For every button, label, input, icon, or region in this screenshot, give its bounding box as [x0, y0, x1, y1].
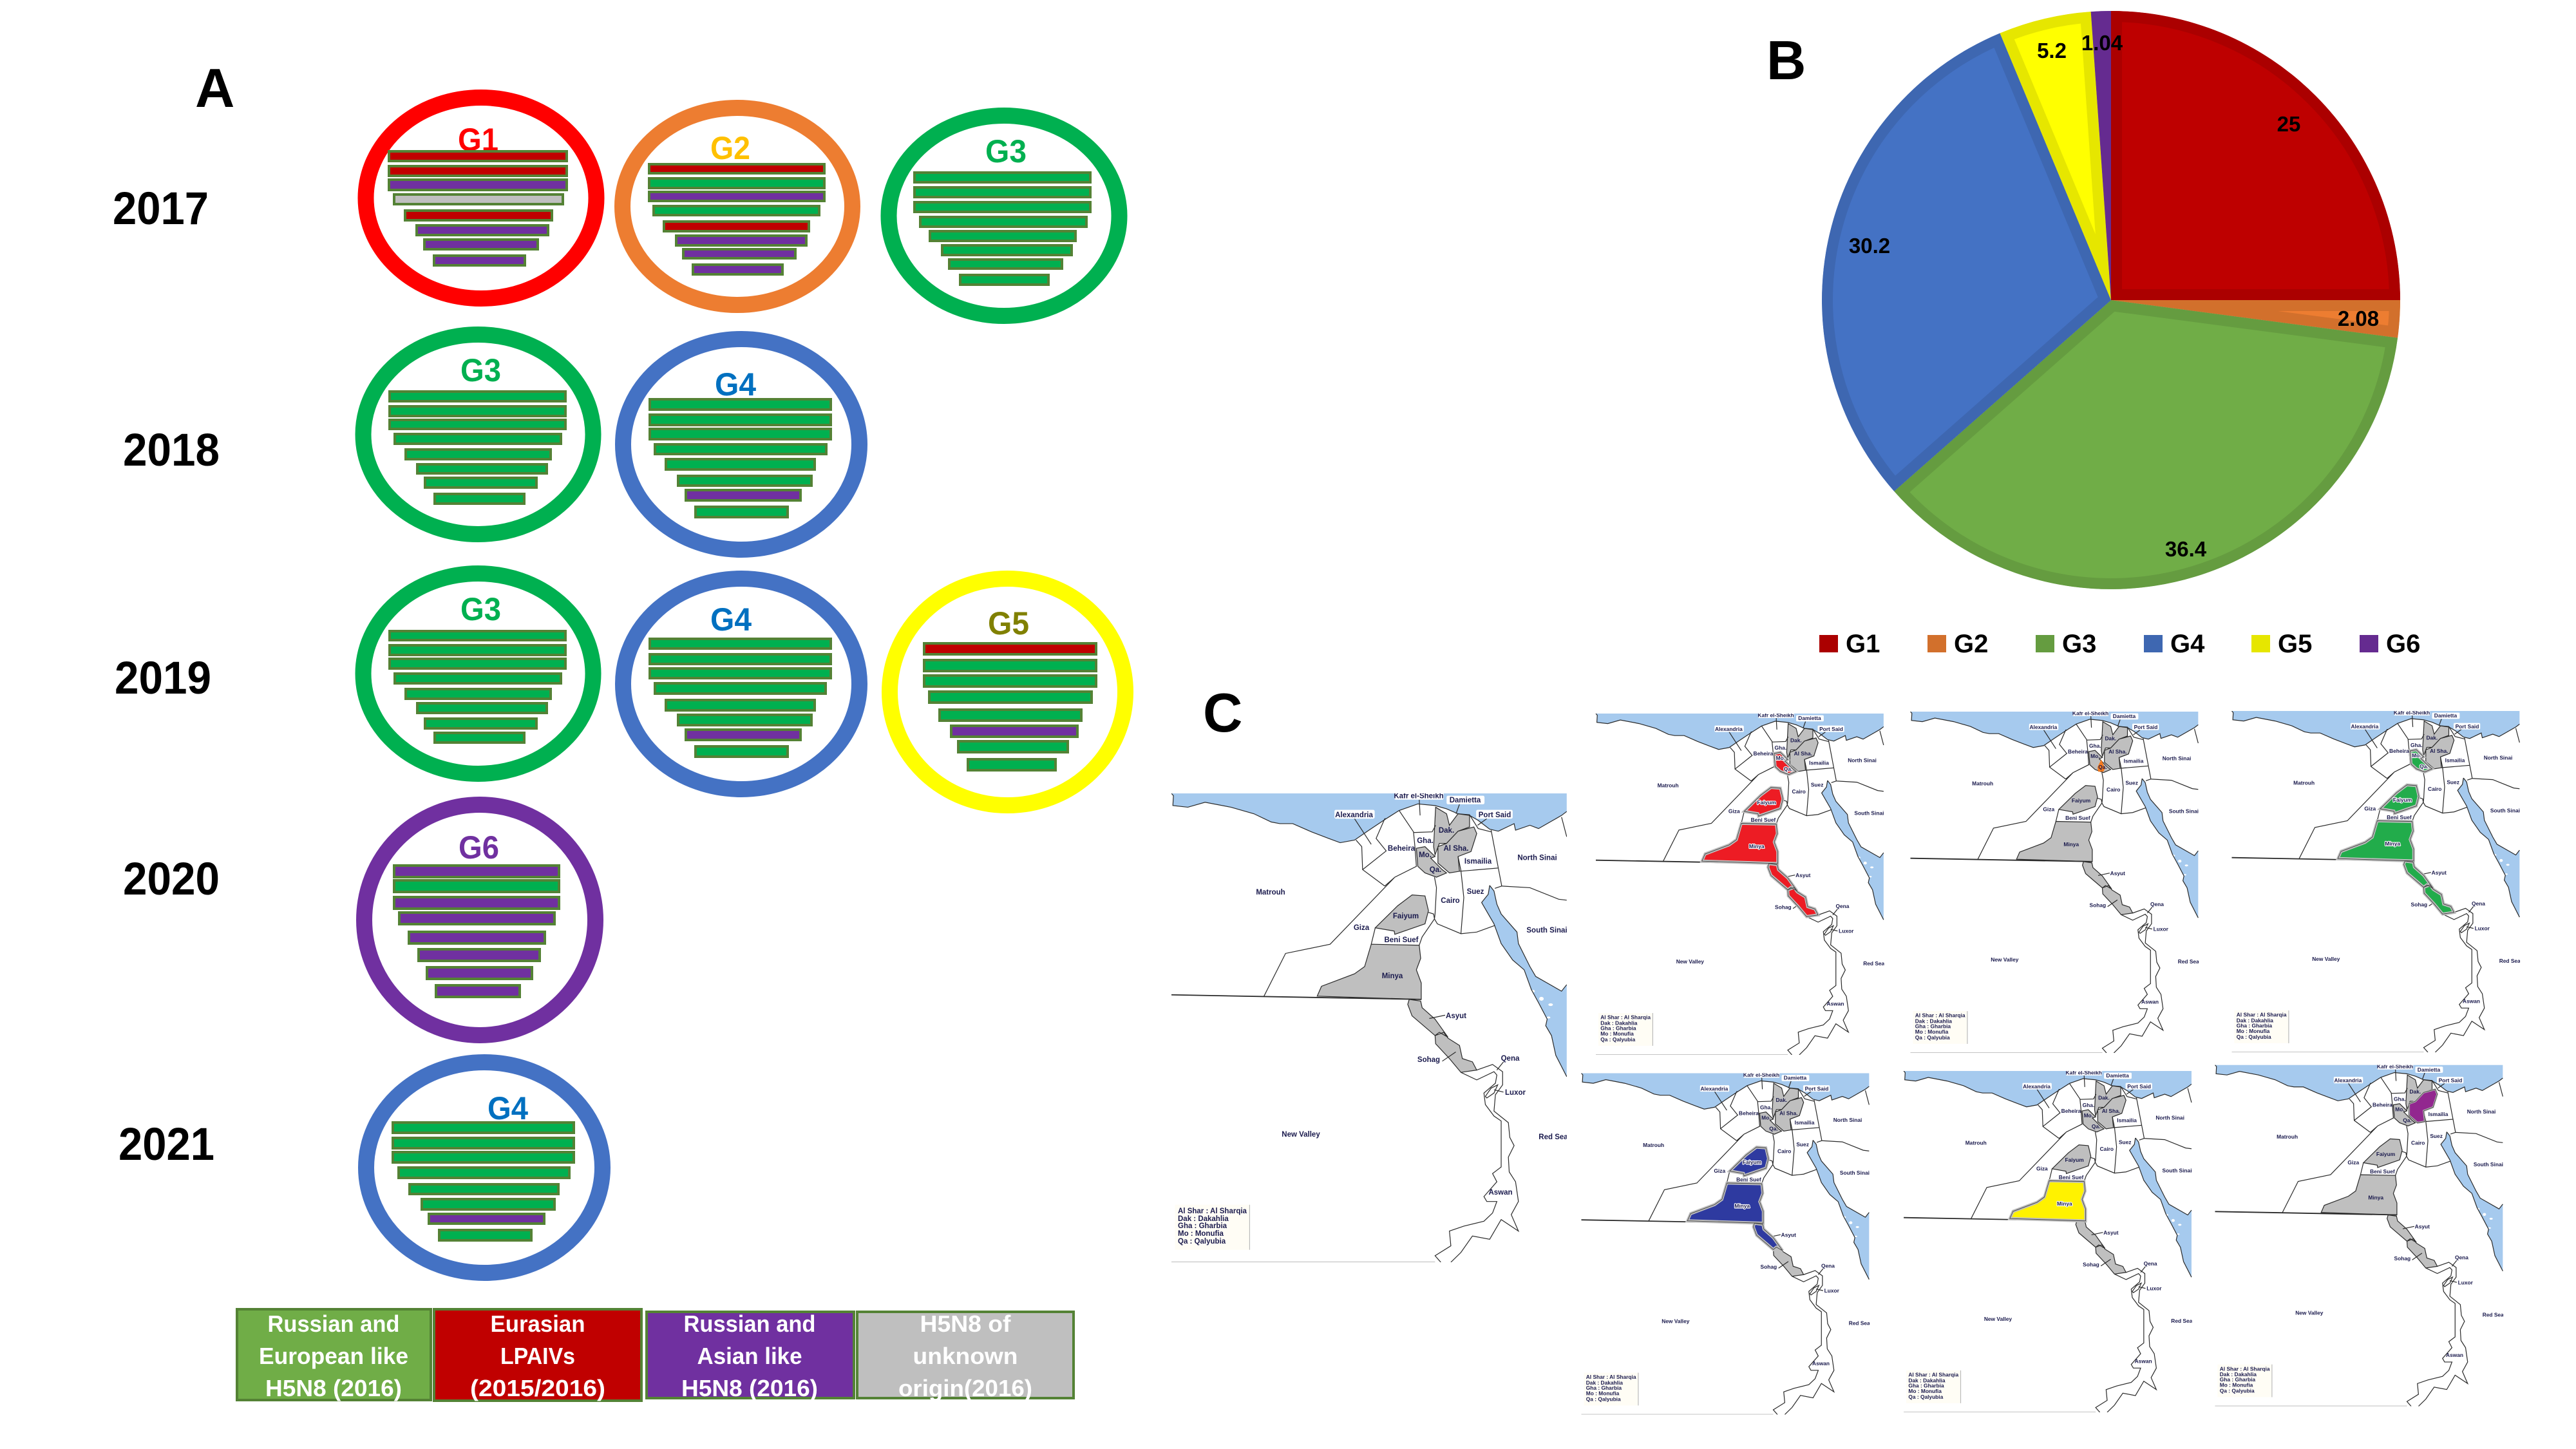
map: G3 distribution (green): Cairo	[2428, 786, 2441, 792]
map: G4 distribution (blue): Matrouh	[1643, 1142, 1664, 1148]
genotype G3 2017	[889, 116, 1119, 316]
map: G1 distribution (red): Sohag	[1775, 904, 1792, 911]
map: Egypt governorates overview: Suez	[1467, 888, 1484, 896]
legend box: H5N8 of unknown origin: H5N8 of	[920, 1311, 1012, 1337]
map: G5 distribution (yellow): Ismailia	[2117, 1117, 2137, 1123]
map: G4 distribution (blue): Alexandria	[1701, 1085, 1728, 1092]
map: G5 distribution (yellow): Suez	[2119, 1139, 2131, 1146]
map: G6 distribution (purple): Faiyum	[2376, 1151, 2395, 1157]
map: G4 distribution (blue): Beni Suef	[1736, 1177, 1761, 1183]
map: G5 distribution (yellow): Al Shar : Al Sharqia	[1908, 1372, 1958, 1378]
pie legend: G3	[2062, 630, 2096, 658]
legend: lineage origin boxes	[237, 1309, 1074, 1401]
map: G5 distribution (yellow): Kafr el-Sheikh	[2066, 1069, 2102, 1075]
map: G2 distribution (orange): Alexandria	[2030, 724, 2058, 730]
genotype G3 2017: G3	[985, 133, 1027, 169]
map: G4 distribution (blue): Al Sha.	[1779, 1110, 1797, 1116]
map: G6 distribution (purple): Al Shar : Al Sharqia	[2220, 1365, 2270, 1372]
map: G1 distribution (red): Giza	[1728, 808, 1740, 814]
map: G4 distribution (blue): Faiyum	[1743, 1159, 1761, 1166]
pie legend: G4	[2170, 630, 2205, 658]
pie legend	[1819, 630, 2420, 658]
pie chart: 30.2	[1849, 234, 1890, 258]
map: Egypt governorates overview: Gha.	[1417, 837, 1434, 845]
genotype G5 2019	[890, 578, 1126, 805]
map: G4 distribution (blue): Qa : Qalyubia	[1586, 1396, 1621, 1402]
pie chart: 2.08	[2338, 307, 2379, 330]
pie legend: G6	[2386, 630, 2420, 658]
map: G1 distribution (red): Qa.	[1784, 766, 1792, 772]
legend box: Russian and European like	[237, 1309, 431, 1401]
map: G6 distribution (purple): Matrouh	[2277, 1133, 2298, 1140]
map: G6 distribution (purple): Luxor	[2458, 1279, 2474, 1285]
map: G2 distribution (orange): Kafr el-Sheikh	[2072, 710, 2108, 716]
map: G3 distribution (green): Beni Suef	[2387, 814, 2412, 820]
map: G6 distribution (purple)	[2215, 1063, 2504, 1406]
map: G2 distribution (orange): South Sinai	[2169, 808, 2199, 814]
map: G2 distribution (orange): Qa.	[2098, 764, 2107, 770]
map: G4 distribution (blue): Giza	[1714, 1168, 1725, 1174]
map: G2 distribution (orange): Qa : Qalyubia	[1915, 1034, 1950, 1041]
map: G5 distribution (yellow): Matrouh	[1965, 1139, 1987, 1146]
legend box: H5N8 of unknown origin: origin(2016)	[898, 1375, 1032, 1401]
map: G2 distribution (orange): Luxor	[2154, 926, 2169, 933]
map: G6 distribution (purple): Gha.	[2394, 1096, 2406, 1103]
map: G2 distribution (orange): Asyut	[2110, 870, 2125, 876]
map: G3 distribution (green): Alexandria	[2351, 723, 2379, 730]
map: Egypt governorates overview: Dak.	[1439, 827, 1454, 835]
map: G4 distribution (blue): Gha : Gharbia	[1586, 1385, 1622, 1391]
map: G4 distribution (blue): Suez	[1796, 1141, 1809, 1148]
map: G6 distribution (purple): Mo.	[2395, 1106, 2405, 1113]
map: Egypt governorates overview: Ismailia	[1464, 858, 1492, 866]
map: G3 distribution (green): Ismailia	[2445, 757, 2465, 763]
map: G1 distribution (red): Damietta	[1798, 715, 1821, 721]
map: G4 distribution (blue): Cairo	[1777, 1148, 1791, 1154]
map: G1 distribution (red): Minya	[1749, 843, 1765, 849]
map: G6 distribution (purple): South Sinai	[2474, 1161, 2503, 1168]
map: Egypt governorates overview: Dak : Dakahlia	[1178, 1215, 1229, 1223]
map: G5 distribution (yellow): Damietta	[2106, 1072, 2129, 1079]
map: G3 distribution (green): Matrouh	[2293, 779, 2315, 786]
map: G3 distribution (green): Red Sea	[2499, 958, 2521, 964]
map: Egypt governorates overview: Red Sea	[1539, 1133, 1568, 1141]
map: Egypt governorates overview: Qa.	[1430, 866, 1441, 874]
map: Egypt governorates overview: Qa : Qalyubia	[1178, 1238, 1226, 1245]
legend box: Russian and European like: H5N8 (2016)	[265, 1375, 402, 1401]
map: G3 distribution (green): Qena	[2472, 900, 2485, 907]
year label 2018: 2018	[123, 425, 220, 476]
map: G6 distribution (purple): Red Sea	[2483, 1312, 2504, 1318]
map: G3 distribution (green): North Sinai	[2484, 754, 2512, 761]
map: G4 distribution (blue): Ismailia	[1795, 1119, 1815, 1126]
legend box: Eurasian LPAIVs	[434, 1309, 641, 1401]
map: G2 distribution (orange): Dak : Dakahlia	[1915, 1018, 1952, 1024]
map: G3 distribution (green): Qa.	[2420, 763, 2429, 770]
map: G2 distribution (orange): New Valley	[1991, 956, 2019, 963]
genotype G6 2020	[365, 805, 595, 1036]
map: G1 distribution (red): Mo : Monufia	[1600, 1030, 1634, 1037]
map: G6 distribution (purple): Sohag	[2394, 1255, 2410, 1262]
map: G6 distribution (purple): Aswan	[2446, 1352, 2463, 1358]
map: G4 distribution (blue): Luxor	[1824, 1287, 1840, 1294]
map: Egypt governorates overview: Faiyum	[1393, 913, 1419, 920]
pie legend: G1	[1846, 630, 1880, 658]
map: G6 distribution (purple): Asyut	[2415, 1224, 2430, 1230]
map: G5 distribution (yellow): Giza	[2036, 1165, 2048, 1171]
map: Egypt governorates overview: New Valley	[1282, 1131, 1320, 1139]
map: G6 distribution (purple): Ismailia	[2429, 1111, 2448, 1117]
map: Egypt governorates overview: North Sinai	[1517, 854, 1557, 862]
map: G1 distribution (red): Red Sea	[1863, 960, 1885, 967]
year label 2019: 2019	[115, 653, 211, 704]
map: G3 distribution (green): Aswan	[2463, 998, 2480, 1005]
map: G2 distribution (orange): Minya	[2063, 841, 2079, 848]
map: G1 distribution (red): Al Shar : Al Sharqia	[1600, 1014, 1651, 1021]
panel label B: B	[1766, 30, 1806, 91]
legend box: Russian and Asian like: Russian and	[684, 1311, 815, 1337]
map: Egypt governorates overview: Beni Suef	[1384, 936, 1419, 944]
map: G3 distribution (green): Gha : Gharbia	[2237, 1022, 2272, 1028]
map: G6 distribution (purple): Qena	[2455, 1255, 2468, 1261]
map: G4 distribution (blue)	[1581, 1072, 1870, 1414]
genotype G3 2018: G3	[460, 352, 501, 388]
map: G6 distribution (purple): Port Said	[2439, 1077, 2462, 1084]
map: G3 distribution (green): Port Said	[2456, 723, 2479, 730]
map: G3 distribution (green): South Sinai	[2490, 807, 2520, 813]
map: G1 distribution (red): Mo.	[1776, 755, 1785, 761]
map: Egypt governorates overview: Al Sha.	[1444, 845, 1468, 853]
map: Egypt governorates overview: Cairo	[1441, 897, 1460, 905]
genotype G2 2017: G2	[710, 130, 750, 166]
map: Egypt governorates overview: Beheira	[1388, 845, 1416, 853]
genotype G1 2017	[366, 98, 596, 299]
map: G6 distribution (purple): Minya	[2368, 1195, 2383, 1201]
map: G4 distribution (blue): Qena	[1821, 1263, 1835, 1269]
map: G2 distribution (orange): Beni Suef	[2065, 815, 2090, 821]
map: G5 distribution (yellow): North Sinai	[2155, 1114, 2184, 1121]
map: Egypt governorates overview: Aswan	[1488, 1189, 1513, 1197]
map: G5 distribution (yellow): Beni Suef	[2059, 1174, 2083, 1180]
map: Egypt governorates overview	[1171, 792, 1568, 1262]
map: G1 distribution (red): Asyut	[1795, 872, 1811, 878]
map: G2 distribution (orange): Mo : Monufia	[1915, 1028, 1949, 1035]
map: G1 distribution (red): Qa : Qalyubia	[1600, 1036, 1636, 1043]
map: G5 distribution (yellow): Aswan	[2135, 1358, 2152, 1365]
map: G4 distribution (blue): Kafr el-Sheikh	[1743, 1072, 1779, 1078]
genotype G4 2021	[366, 1063, 603, 1273]
map: G4 distribution (blue): Al Shar : Al Sharqia	[1586, 1374, 1636, 1380]
genotype G1 2017: G1	[458, 122, 498, 158]
map: G2 distribution (orange): Aswan	[2141, 999, 2159, 1005]
year label 2021: 2021	[118, 1119, 214, 1170]
map: G2 distribution (orange)	[1910, 710, 2199, 1053]
genotype G4 2018	[623, 339, 859, 550]
legend box: Eurasian LPAIVs: LPAIVs	[500, 1343, 575, 1369]
map: Egypt governorates overview: Al Shar : Al Sharqia	[1178, 1208, 1247, 1215]
map: G3 distribution (green): Al Sha.	[2430, 748, 2448, 754]
map: G4 distribution (blue): Beheira	[1739, 1110, 1759, 1116]
legend box: H5N8 of unknown origin: unknown	[913, 1343, 1018, 1369]
genotype G3 2019: G3	[460, 591, 501, 627]
map: G1 distribution (red): Kafr el-Sheikh	[1757, 712, 1794, 718]
map: G6 distribution (purple): Dak : Dakahlia	[2220, 1371, 2257, 1378]
map: G3 distribution (green): Kafr el-Sheikh	[2394, 709, 2430, 715]
map: G1 distribution (red): Matrouh	[1658, 782, 1679, 788]
map: G1 distribution (red): New Valley	[1676, 958, 1704, 965]
legend box: Russian and European like: Russian and	[268, 1311, 399, 1337]
map: G5 distribution (yellow): Port Said	[2127, 1083, 2151, 1090]
map: G3 distribution (green): Qa : Qalyubia	[2237, 1034, 2271, 1040]
map: G5 distribution (yellow): Mo : Monufia	[1908, 1388, 1942, 1394]
map: G1 distribution (red): South Sinai	[1854, 810, 1884, 816]
map: G6 distribution (purple): Mo : Monufia	[2220, 1382, 2253, 1388]
map: G1 distribution (red): Port Said	[1819, 726, 1843, 732]
map: Egypt governorates overview: Matrouh	[1256, 889, 1285, 896]
map: G4 distribution (blue): Dak.	[1776, 1097, 1787, 1103]
map: G2 distribution (orange): Damietta	[2113, 713, 2136, 719]
map: G6 distribution (purple): Kafr el-Sheikh	[2377, 1063, 2413, 1070]
map: G1 distribution (red): Ismailia	[1809, 759, 1829, 766]
map: G4 distribution (blue): Minya	[1734, 1202, 1750, 1209]
map: G5 distribution (yellow): Alexandria	[2023, 1083, 2050, 1090]
map: G2 distribution (orange): Giza	[2043, 806, 2054, 812]
map: G5 distribution (yellow): Gha.	[2083, 1102, 2094, 1108]
map: G4 distribution (blue): Mo : Monufia	[1586, 1390, 1620, 1397]
map: G5 distribution (yellow): Beheira	[2061, 1108, 2081, 1114]
map: G3 distribution (green): Asyut	[2432, 869, 2447, 876]
legend box: H5N8 of unknown origin	[857, 1311, 1074, 1401]
map: G4 distribution (blue): Port Said	[1805, 1085, 1828, 1092]
map: G1 distribution (red): Alexandria	[1715, 726, 1743, 732]
map: G5 distribution (yellow): Qa.	[2092, 1123, 2100, 1130]
map: G1 distribution (red): Beheira	[1754, 750, 1774, 757]
map: G1 distribution (red): Faiyum	[1757, 799, 1776, 806]
map: G3 distribution (green): Mo : Monufia	[2237, 1028, 2270, 1034]
legend box: Eurasian LPAIVs: (2015/2016)	[470, 1375, 605, 1401]
map: G2 distribution (orange): Dak.	[2105, 735, 2116, 741]
map: G5 distribution (yellow): Dak.	[2098, 1094, 2110, 1101]
map: G6 distribution (purple): Cairo	[2411, 1139, 2425, 1146]
map: G2 distribution (orange): Gha : Gharbia	[1915, 1023, 1951, 1029]
map: G5 distribution (yellow): Qa : Qalyubia	[1908, 1394, 1944, 1400]
map: G1 distribution (red): Beni Suef	[1751, 817, 1776, 823]
map: G2 distribution (orange): Gha.	[2089, 743, 2101, 749]
map: Egypt governorates overview: Mo : Monufia	[1178, 1230, 1224, 1238]
map: G3 distribution (green): Gha.	[2410, 742, 2423, 748]
genotype G6 2020: G6	[459, 829, 499, 866]
map: G2 distribution (orange): Sohag	[2090, 902, 2106, 909]
map: G4 distribution (blue): Damietta	[1784, 1075, 1806, 1081]
map: G4 distribution (blue): Sohag	[1761, 1264, 1777, 1270]
map: G1 distribution (red): Dak.	[1790, 737, 1802, 743]
map: G1 distribution (red): Qena	[1835, 903, 1850, 909]
map: G6 distribution (purple): Giza	[2347, 1159, 2359, 1166]
panel label C: C	[1203, 683, 1242, 744]
map: G3 distribution (green): Luxor	[2475, 925, 2490, 932]
map: G6 distribution (purple): North Sinai	[2467, 1108, 2496, 1115]
map: G3 distribution (green)	[2231, 709, 2521, 1052]
map: G3 distribution (green): Minya	[2385, 840, 2400, 847]
map: G1 distribution (red): Gha : Gharbia	[1600, 1025, 1636, 1031]
genotype G2 2017	[622, 108, 853, 305]
map: G6 distribution (purple): Dak.	[2410, 1088, 2421, 1095]
map: G5 distribution (yellow): Asyut	[2103, 1229, 2119, 1236]
map: G5 distribution (yellow): Dak : Dakahlia	[1908, 1377, 1946, 1383]
map: G2 distribution (orange): Al Sha.	[2108, 748, 2126, 755]
genotype G4 2021: G4	[488, 1090, 528, 1126]
genotype G3 2018	[363, 335, 593, 535]
map: G3 distribution (green): Damietta	[2434, 712, 2457, 719]
panel label A: A	[195, 58, 234, 119]
map: G4 distribution (blue): Qa.	[1769, 1125, 1778, 1132]
map: G1 distribution (red): Luxor	[1839, 928, 1854, 934]
map: G3 distribution (green): Faiyum	[2393, 797, 2412, 803]
map: G1 distribution (red): Aswan	[1827, 1001, 1844, 1007]
map: G1 distribution (red): Cairo	[1792, 788, 1806, 795]
map: G5 distribution (yellow): Red Sea	[2171, 1318, 2193, 1324]
genotype G4 2019: G4	[710, 601, 752, 638]
map: Egypt governorates overview: Port Said	[1479, 811, 1511, 819]
map: G3 distribution (green): Beheira	[2389, 748, 2409, 754]
map: G3 distribution (green): Giza	[2364, 805, 2376, 811]
map: G4 distribution (blue): Red Sea	[1849, 1320, 1870, 1326]
legend box: Russian and Asian like	[647, 1311, 854, 1401]
pie chart	[1822, 11, 2400, 589]
map: G3 distribution (green): New Valley	[2312, 956, 2340, 962]
map: G4 distribution (blue): Dak : Dakahlia	[1586, 1379, 1623, 1386]
map: Egypt governorates overview: Qena	[1501, 1055, 1520, 1063]
map: G5 distribution (yellow): Minya	[2057, 1200, 2072, 1207]
map: G3 distribution (green): Dak.	[2427, 734, 2438, 741]
pie legend: G5	[2278, 630, 2312, 658]
map: G6 distribution (purple): New Valley	[2295, 1310, 2324, 1316]
map: G5 distribution (yellow): Gha : Gharbia	[1908, 1382, 1944, 1388]
map: G2 distribution (orange): Port Said	[2134, 724, 2157, 730]
map: Egypt governorates overview: Mo.	[1419, 851, 1432, 859]
map: G5 distribution (yellow): Mo.	[2084, 1112, 2093, 1119]
map: G1 distribution (red): North Sinai	[1848, 757, 1877, 763]
legend box: Russian and European like: European like	[259, 1343, 408, 1369]
map: Egypt governorates overview: Damietta	[1450, 797, 1481, 804]
map: G4 distribution (blue): Gha.	[1760, 1104, 1772, 1111]
genotype G4 2018: G4	[715, 366, 756, 402]
map: G1 distribution (red): Suez	[1811, 782, 1823, 788]
map: G5 distribution (yellow): Faiyum	[2065, 1157, 2084, 1163]
map: G6 distribution (purple): Suez	[2430, 1133, 2443, 1139]
map: Egypt governorates overview: Alexandria	[1335, 811, 1374, 819]
map: G6 distribution (purple): Beheira	[2372, 1101, 2392, 1108]
map: G2 distribution (orange): Ismailia	[2124, 757, 2144, 764]
map: G1 distribution (red): Dak : Dakahlia	[1600, 1019, 1638, 1026]
map: G5 distribution (yellow)	[1904, 1069, 2193, 1412]
map: G2 distribution (orange): Suez	[2125, 780, 2138, 786]
genotype G3 2019	[363, 573, 593, 774]
map: G4 distribution (blue): Asyut	[1781, 1232, 1796, 1238]
map: G5 distribution (yellow): Luxor	[2146, 1285, 2162, 1292]
legend box: Russian and Asian like: Asian like	[697, 1343, 802, 1369]
map: G6 distribution (purple): Qa.	[2403, 1117, 2412, 1123]
map: G2 distribution (orange): Cairo	[2107, 786, 2120, 793]
genotype G4 2019	[623, 578, 859, 790]
legend box: Eurasian LPAIVs: Eurasian	[491, 1311, 585, 1337]
map: G2 distribution (orange): North Sinai	[2163, 755, 2191, 761]
pie chart: 36.4	[2165, 537, 2207, 561]
genotype G5 2019: G5	[988, 605, 1029, 641]
map: G3 distribution (green): Sohag	[2411, 902, 2427, 908]
map: Egypt governorates overview: South Sinai	[1526, 927, 1567, 934]
map: G5 distribution (yellow): Cairo	[2100, 1146, 2114, 1152]
map: G5 distribution (yellow): Qena	[2144, 1260, 2157, 1267]
map: G6 distribution (purple): Gha : Gharbia	[2220, 1376, 2255, 1383]
map: G1 distribution (red): Al Sha.	[1794, 750, 1812, 757]
map: Egypt governorates overview: Sohag	[1417, 1056, 1440, 1064]
map: Egypt governorates overview: Giza	[1354, 924, 1370, 932]
map: G5 distribution (yellow): Sohag	[2083, 1262, 2099, 1268]
year label 2017: 2017	[113, 184, 209, 234]
map: G4 distribution (blue): South Sinai	[1840, 1170, 1870, 1176]
map: G3 distribution (green): Suez	[2447, 779, 2459, 786]
map: Egypt governorates overview: Asyut	[1446, 1012, 1466, 1020]
map: G2 distribution (orange): Qena	[2150, 901, 2164, 907]
pie legend: G2	[1954, 630, 1988, 658]
map: G1 distribution (red)	[1596, 712, 1885, 1055]
map: G6 distribution (purple): Alexandria	[2334, 1077, 2362, 1084]
map: G2 distribution (orange): Al Shar : Al Sharqia	[1915, 1012, 1965, 1019]
map: G4 distribution (blue): Aswan	[1812, 1360, 1830, 1367]
map: Egypt governorates overview: Minya	[1382, 972, 1403, 980]
map: G3 distribution (green): Mo.	[2412, 752, 2421, 759]
pie chart: 5.2	[2037, 39, 2067, 62]
map: G3 distribution (green): Al Shar : Al Sharqia	[2237, 1012, 2287, 1018]
map: G3 distribution (green): Dak : Dakahlia	[2237, 1017, 2273, 1023]
legend box: Russian and Asian like: H5N8 (2016)	[681, 1375, 818, 1401]
map: G2 distribution (orange): Faiyum	[2072, 797, 2090, 804]
map: G6 distribution (purple): Damietta	[2418, 1066, 2440, 1073]
map: G4 distribution (blue): North Sinai	[1833, 1117, 1862, 1123]
map: G5 distribution (yellow): South Sinai	[2163, 1167, 2192, 1173]
map: Egypt governorates overview: Kafr el-Sheikh	[1394, 792, 1444, 800]
map: G5 distribution (yellow): New Valley	[1984, 1316, 2012, 1322]
map: Egypt governorates overview: Luxor	[1505, 1089, 1526, 1097]
map: G6 distribution (purple): Beni Suef	[2370, 1168, 2395, 1175]
pie chart: 1.04	[2081, 31, 2123, 55]
map: G1 distribution (red): Gha.	[1775, 744, 1786, 751]
map: G6 distribution (purple): Qa : Qalyubia	[2220, 1387, 2255, 1394]
map: G2 distribution (orange): Red Sea	[2178, 958, 2199, 965]
map: G2 distribution (orange): Mo.	[2090, 753, 2100, 759]
map: G4 distribution (blue): Mo.	[1761, 1115, 1771, 1121]
map: G2 distribution (orange): Beheira	[2068, 748, 2088, 755]
map: G5 distribution (yellow): Al Sha.	[2102, 1108, 2120, 1114]
map: G4 distribution (blue): New Valley	[1662, 1318, 1690, 1325]
map: G2 distribution (orange): Matrouh	[1972, 780, 1993, 786]
pie chart: 25	[2277, 112, 2300, 136]
map: Egypt governorates overview: Gha : Gharbia	[1178, 1222, 1227, 1230]
year label 2020: 2020	[123, 854, 220, 905]
